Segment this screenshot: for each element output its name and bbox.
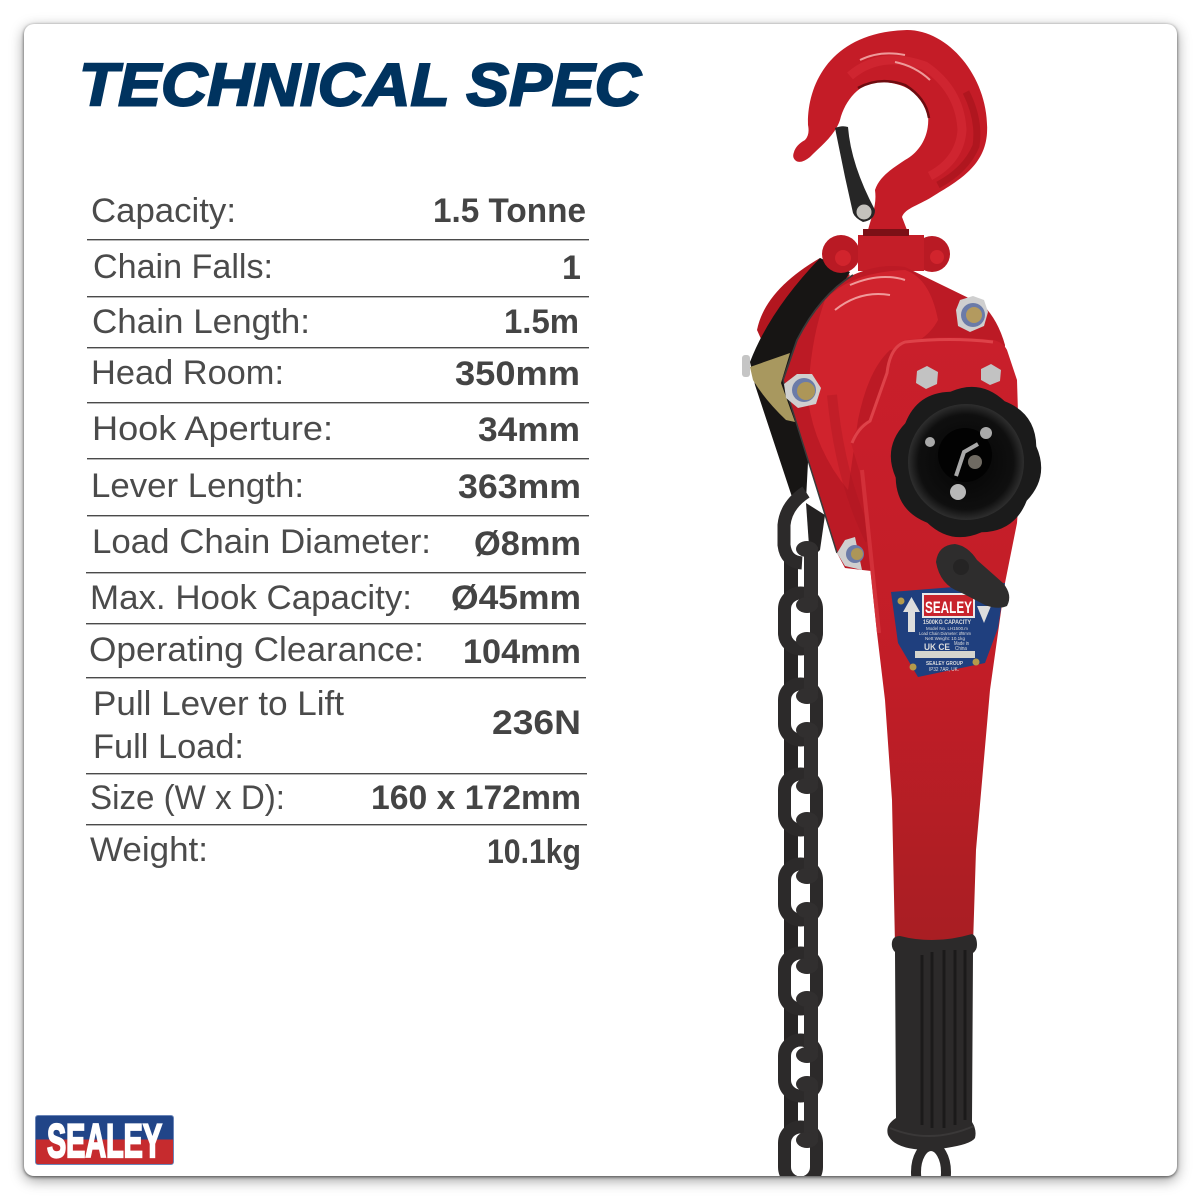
logo: SEALEY <box>36 1114 174 1167</box>
data plate: SEALEY <box>925 598 972 617</box>
row: max hook capacity <box>90 579 581 617</box>
hook <box>793 30 987 230</box>
row: chain falls: Chain Falls: <box>93 248 273 286</box>
row: pull lever: Full Load: <box>93 728 244 766</box>
data plate: China <box>955 646 967 652</box>
lever <box>851 338 1020 945</box>
row: head room: Head Room: <box>91 354 284 392</box>
row: pull lever: 236N <box>492 704 581 742</box>
row: weight: 10.1kg <box>487 833 581 871</box>
lower chain <box>911 1148 951 1176</box>
data plate: SEALEY GROUP <box>926 661 963 667</box>
row: weight <box>90 831 581 871</box>
row: operating clearance: 104mm <box>463 633 581 671</box>
row: capacity <box>91 192 586 230</box>
row: head room: 350mm <box>455 355 580 393</box>
row: hook aperture <box>92 410 580 449</box>
row: load chain diameter: Ø8mm <box>474 525 581 563</box>
row: operating clearance <box>89 631 581 671</box>
data plate: Nett Weight: 10.1kg <box>925 636 965 641</box>
bolts <box>784 296 988 570</box>
row: capacity: 1.5 Tonne <box>433 192 586 230</box>
data plate: Load Chain Diameter: Ø8mm <box>919 631 971 636</box>
pawl <box>936 544 1009 608</box>
rubber grip <box>887 934 977 1150</box>
row: hook aperture: 34mm <box>478 411 580 449</box>
row: max hook capacity: Max. Hook Capacity: <box>90 579 412 617</box>
row: chain length: Chain Length: <box>92 303 310 341</box>
load chain <box>784 492 825 1183</box>
main housing <box>783 266 1005 572</box>
back plate <box>742 258 850 500</box>
data plate: UK CE <box>924 642 950 652</box>
row: chain falls: 1 <box>562 249 581 287</box>
row: hook aperture: Hook Aperture: <box>92 410 333 448</box>
row: head room <box>91 354 580 393</box>
data plate: 1500KG CAPACITY <box>923 620 971 626</box>
row: pull lever <box>93 685 581 766</box>
row: capacity: Capacity: <box>91 192 236 230</box>
row: chain falls <box>93 248 581 287</box>
spec table <box>86 192 589 871</box>
row: load chain diameter <box>92 523 581 563</box>
row: lever length: 363mm <box>458 468 581 506</box>
row: chain length: 1.5m <box>504 303 579 341</box>
row: weight: Weight: <box>90 831 208 869</box>
row: load chain diameter: Load Chain Diameter: <box>92 523 431 561</box>
data plate: IP32 7AR, UK. <box>929 667 959 673</box>
data plate: Model No. LH1500.m <box>926 626 968 631</box>
data plate: Made in <box>954 641 969 647</box>
row: lever length <box>91 467 581 506</box>
row: chain length <box>92 303 579 341</box>
row: size: 160 x 172mm <box>371 779 581 817</box>
row: size <box>90 779 581 817</box>
row: operating clearance: Operating Clearance: <box>89 631 424 669</box>
row: lever length: Lever Length: <box>91 467 304 505</box>
data plate <box>891 583 1005 677</box>
safety latch <box>835 126 875 222</box>
hex bolts <box>916 364 1001 389</box>
row: max hook capacity: Ø45mm <box>451 579 581 617</box>
knob <box>891 387 1041 537</box>
title: TECHNICAL SPEC <box>79 52 643 118</box>
illustration: lever hoist <box>742 30 1041 1198</box>
row: size: Size (W x D): <box>90 779 285 817</box>
row: pull lever: Pull Lever to Lift <box>93 685 345 723</box>
yoke <box>822 229 950 273</box>
logo: SEALEY: SEALEY <box>47 1114 162 1167</box>
